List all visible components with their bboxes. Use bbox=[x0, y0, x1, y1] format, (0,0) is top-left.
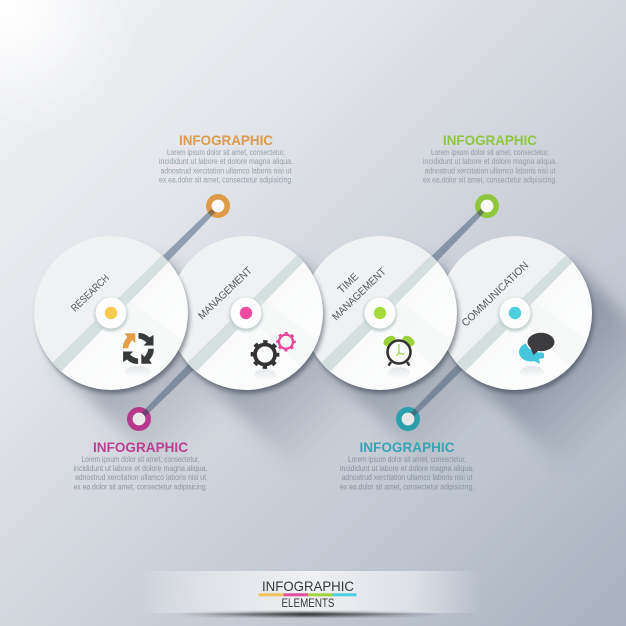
icon: gears bbox=[252, 333, 295, 381]
connector: top right bbox=[426, 204, 489, 267]
text block: top right bbox=[423, 132, 557, 184]
icon: knob green bbox=[363, 298, 397, 332]
ring: teal bbox=[399, 410, 417, 428]
heading: bottom left: INFOGRAPHIC bbox=[93, 439, 188, 455]
label: research: RESEARCH bbox=[69, 272, 112, 314]
text block: top right: adnostrud xercitation ullamco laboris nisi ut bbox=[424, 166, 556, 176]
icon: speech bubbles bbox=[519, 332, 556, 378]
text block: bottom right: incididunt ut labore et dolore magna aliqua. bbox=[340, 464, 474, 473]
heading: top left: INFOGRAPHIC bbox=[179, 132, 273, 148]
footer colour bar bbox=[258, 593, 356, 596]
text block: bottom left: ex ea.dolor sit amet, consectetur adipisicing. bbox=[74, 482, 208, 492]
panel: time management disc bbox=[312, 236, 462, 396]
icon: alarm clock bbox=[382, 334, 416, 379]
footer banner bbox=[140, 571, 482, 616]
connector: top left bbox=[157, 204, 220, 267]
panel: communication disc bbox=[447, 236, 596, 396]
text block: bottom left: incididunt ut labore et dolore magna aliqua. bbox=[74, 464, 208, 473]
text block: top left: Lorem ipsum dolor sit amet, consectetur, bbox=[167, 148, 285, 157]
text block: top right: incididunt ut labore et dolore magna aliqua. bbox=[423, 157, 557, 166]
panel: research disc bbox=[34, 236, 192, 396]
text block: bottom right: ex ea.dolor sit amet, consectetur adipisicing. bbox=[340, 482, 474, 492]
panel: management disc bbox=[178, 236, 328, 396]
footer title: INFOGRAPHIC bbox=[262, 578, 354, 594]
text block: bottom left bbox=[74, 439, 208, 492]
text block: bottom right: adnostrud xercitation ullamco laboris nisi ut bbox=[342, 473, 473, 482]
ring: magenta bbox=[130, 410, 148, 428]
text block: top right: Lorem ipsum dolor sit amet, consectetur, bbox=[431, 148, 549, 157]
connector: bottom left bbox=[137, 358, 200, 421]
text block: bottom left: Lorem ipsum dolor sit amet, consectetur, bbox=[82, 455, 200, 464]
text block: bottom left: adnostrud xercitation ullamco laboris nisi ut bbox=[75, 473, 207, 482]
text block: top left: ex ea.dolor sit amet, consectetur adipisicing. bbox=[159, 176, 293, 184]
icon: cycle arrows bbox=[123, 333, 154, 378]
label: management: MANAGEMENT bbox=[196, 264, 255, 322]
heading: top right: INFOGRAPHIC bbox=[443, 132, 537, 148]
icon: knob cyan bbox=[498, 298, 532, 332]
long cast shadows bbox=[57, 259, 626, 476]
text block: top left: adnostrud xercitation ullamco laboris nisi ut bbox=[160, 166, 292, 176]
text block: top left bbox=[159, 132, 293, 184]
ring: green bbox=[478, 197, 496, 215]
text block: top left: incididunt ut labore et dolore magna aliqua. bbox=[159, 157, 293, 166]
label: time management: TIME bbox=[336, 271, 361, 296]
label: communication: COMMUNICATION bbox=[460, 259, 531, 329]
icon: knob magenta bbox=[229, 298, 263, 332]
ring: orange bbox=[209, 197, 227, 215]
connector: bottom right bbox=[406, 358, 469, 421]
text block: bottom right bbox=[340, 439, 474, 492]
text block: top right: ex ea.dolor sit amet, consectetur adipisicing. bbox=[423, 176, 557, 184]
text block: bottom right: Lorem ipsum dolor sit amet, consectetur, bbox=[348, 455, 466, 464]
heading: bottom right: INFOGRAPHIC bbox=[360, 439, 454, 455]
footer subtitle: ELEMENTS bbox=[282, 596, 334, 610]
label: time management: MANAGEMENT bbox=[330, 265, 389, 323]
icon: knob yellow bbox=[94, 298, 128, 332]
